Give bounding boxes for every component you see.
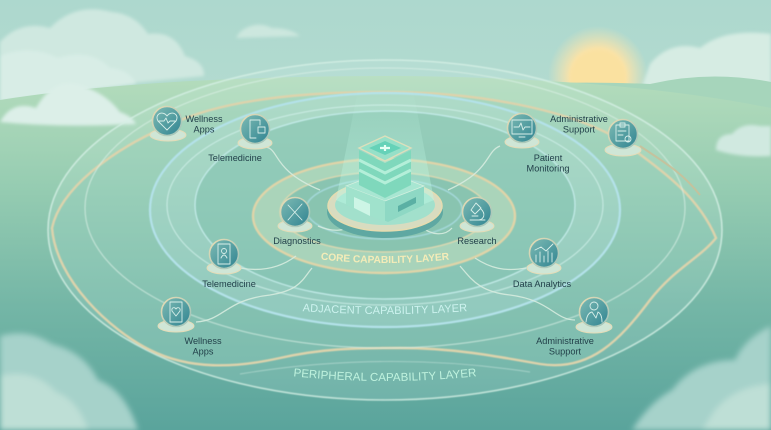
- label: administrative support lower: Administrative: [536, 336, 594, 346]
- icon: data analytics: [527, 238, 561, 274]
- label: telemedicine lower: Telemedicine: [202, 279, 256, 289]
- icon: patient monitoring: [505, 114, 539, 148]
- label: wellness apps lower: Apps: [193, 346, 214, 356]
- label: wellness apps lower: Wellness: [184, 336, 222, 346]
- distant hill: [440, 76, 771, 120]
- sun: [548, 26, 648, 126]
- icon: administrative support top: [605, 120, 641, 156]
- label: telemedicine top: Telemedicine: [208, 153, 262, 163]
- icon: telemedicine top: [238, 114, 272, 149]
- label: research: Research: [457, 236, 497, 246]
- label: patient monitoring: Patient: [534, 153, 562, 163]
- label: administrative support lower: Support: [549, 346, 582, 356]
- label: administrative support top: Administrative: [550, 114, 608, 124]
- heading: adjacent capability layer: ADJACENT CAPABILITY LAYER: [302, 304, 467, 314]
- panel: peripheral capability layer: [48, 60, 722, 400]
- foreground clouds: [0, 326, 771, 430]
- panel: adjacent capability layer: [150, 93, 620, 327]
- panel: core capability layer: [253, 159, 515, 273]
- icon: administrative support lower: [576, 298, 612, 333]
- icon: research: [460, 198, 494, 232]
- icon: wellness apps top: [150, 106, 186, 141]
- connectors: [196, 146, 700, 322]
- label: administrative support top: Support: [563, 124, 596, 134]
- icon: telemedicine lower: [207, 240, 241, 274]
- icon: diagnostics: [278, 198, 312, 232]
- heading: peripheral capability layer: PERIPHERAL CAPABILITY LAYER: [294, 368, 476, 381]
- icon: central hospital on platform: [327, 90, 443, 238]
- label: wellness apps top: Wellness: [185, 114, 223, 124]
- right mid cloud: [716, 125, 771, 156]
- label: patient monitoring: Monitoring: [527, 164, 569, 174]
- label: data analytics: Data Analytics: [513, 279, 572, 289]
- heading: core capability layer: CORE CAPABILITY LAYER: [321, 252, 449, 263]
- left mid cloud: [0, 83, 136, 126]
- icon: wellness apps lower: [158, 298, 194, 332]
- background clouds: [0, 9, 771, 102]
- label: diagnostics: Diagnostics: [273, 236, 321, 246]
- label: wellness apps top: Apps: [194, 124, 215, 134]
